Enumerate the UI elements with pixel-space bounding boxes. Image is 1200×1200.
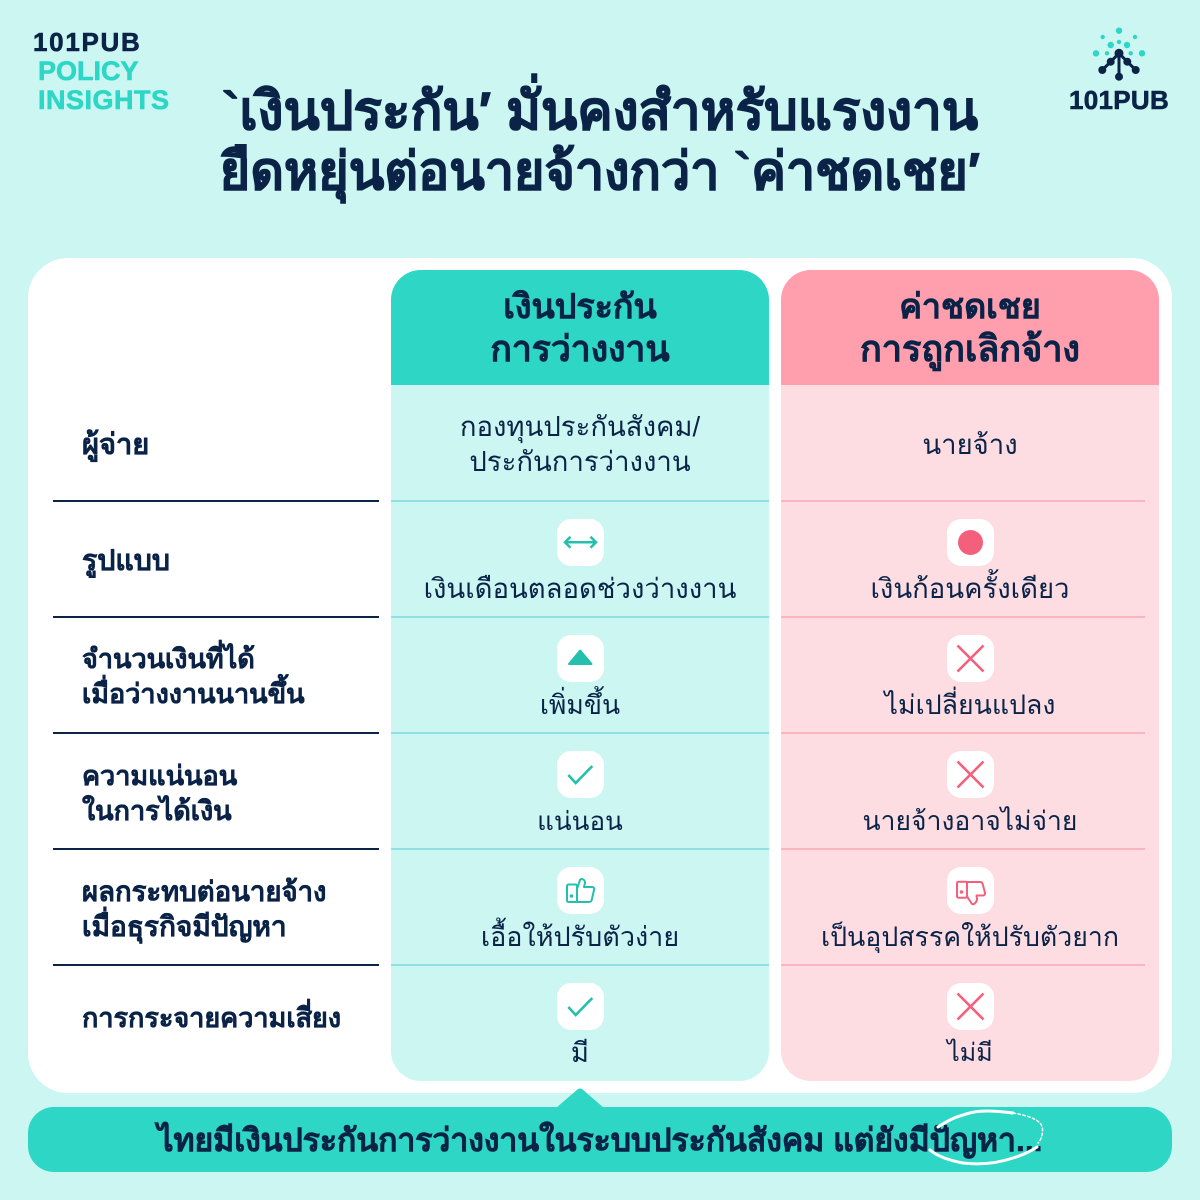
cell text: has: มี xyxy=(571,1037,589,1068)
icon: check xyxy=(557,983,604,1030)
column header: unemployment insurance: เงินประกัน xyxy=(503,288,657,326)
icon: double arrow xyxy=(557,519,604,566)
cell text: no change: ไม่เปลี่ยนแปลง xyxy=(885,690,1055,720)
row label: amount over time xyxy=(82,640,305,708)
row label: employer impact xyxy=(82,876,326,944)
row label: risk sharing: การกระจายความเสี่ยง xyxy=(82,1003,341,1033)
logo: 101PUB Policy Insights: POLICY xyxy=(38,56,139,86)
row label: certainty: ความแน่นอน xyxy=(82,761,237,791)
cell: payer, severance: นายจ้าง xyxy=(922,429,1018,460)
logo: 101PUB emblem xyxy=(1069,28,1169,115)
logo: 101PUB Policy Insights: INSIGHTS xyxy=(38,85,170,115)
row label: amount over time: เมื่อว่างงานนานขึ้น xyxy=(82,678,305,708)
banner pointer xyxy=(557,1088,603,1107)
icon: cross xyxy=(947,635,994,682)
row label: employer impact: เมื่อธุรกิจมีปัญหา xyxy=(82,910,287,942)
bottom banner xyxy=(28,1088,1172,1172)
cell text: monthly pay: เงินเดือนตลอดช่วงว่างงาน xyxy=(424,573,736,604)
cell: payer, insurance: ประกันการว่างงาน xyxy=(469,446,691,476)
logo: 101PUB Policy Insights xyxy=(33,27,170,115)
icon: cross xyxy=(947,983,994,1030)
row label: certainty xyxy=(82,761,238,826)
logo: 101PUB Policy Insights: 101PUB xyxy=(33,27,141,57)
icon: check xyxy=(557,751,604,798)
logo: 101PUB emblem: 101PUB xyxy=(1069,85,1169,115)
banner text: ไทยมีเงินประกันการว่างงานในระบบประกันสังคม แต่ยังมีปัญหา... xyxy=(157,1122,1043,1158)
title: `เงินประกัน′ มั่นคงสำหรับแรงงาน xyxy=(222,82,978,141)
row label: format: รูปแบบ xyxy=(82,545,170,577)
title: ยืดหยุ่นต่อนายจ้างกว่า `ค่าชดเชย′ xyxy=(220,143,980,201)
title xyxy=(220,73,980,204)
row label: payer: ผู้จ่าย xyxy=(82,429,149,461)
hand-drawn circle xyxy=(928,1110,1044,1166)
row label: certainty: ในการได้เงิน xyxy=(82,796,232,826)
cell text: lump sum: เงินก้อนครั้งเดียว xyxy=(870,573,1070,604)
cell text: increases: เพิ่มขึ้น xyxy=(540,690,620,720)
banner bar xyxy=(28,1107,1172,1172)
column header: unemployment insurance xyxy=(391,270,769,385)
column header: severance pay: ค่าชดเชย xyxy=(899,288,1041,326)
row label: employer impact: ผลกระทบต่อนายจ้าง xyxy=(82,876,326,907)
panel: severance pay column xyxy=(781,270,1159,1081)
column header: unemployment insurance: การว่างงาน xyxy=(490,329,670,369)
icon: cross xyxy=(947,751,994,798)
icon: thumbs down xyxy=(947,867,994,914)
cell text: certain: แน่นอน xyxy=(537,806,623,836)
panel: unemployment insurance column xyxy=(391,270,769,1081)
row label: amount over time: จำนวนเงินที่ได้ xyxy=(82,644,255,674)
cell: payer, insurance: กองทุนประกันสังคม/ xyxy=(460,411,700,442)
icon: thumbs up xyxy=(557,867,604,914)
cell: payer, insurance xyxy=(460,411,700,476)
icon: up triangle xyxy=(557,635,604,682)
panel: white table background xyxy=(28,258,1172,1093)
icon: dot xyxy=(947,519,994,566)
column header: severance pay xyxy=(781,270,1159,385)
cell text: helps adaptation: เอื้อให้ปรับตัวง่าย xyxy=(481,922,679,952)
cell text: none: ไม่มี xyxy=(947,1039,993,1067)
cell text: employer may not pay: นายจ้างอาจไม่จ่าย xyxy=(863,806,1077,836)
column header: severance pay: การถูกเลิกจ้าง xyxy=(860,328,1080,369)
cell text: hinders adaptation: เป็นอุปสรรคให้ปรับตัวยาก xyxy=(821,922,1119,952)
